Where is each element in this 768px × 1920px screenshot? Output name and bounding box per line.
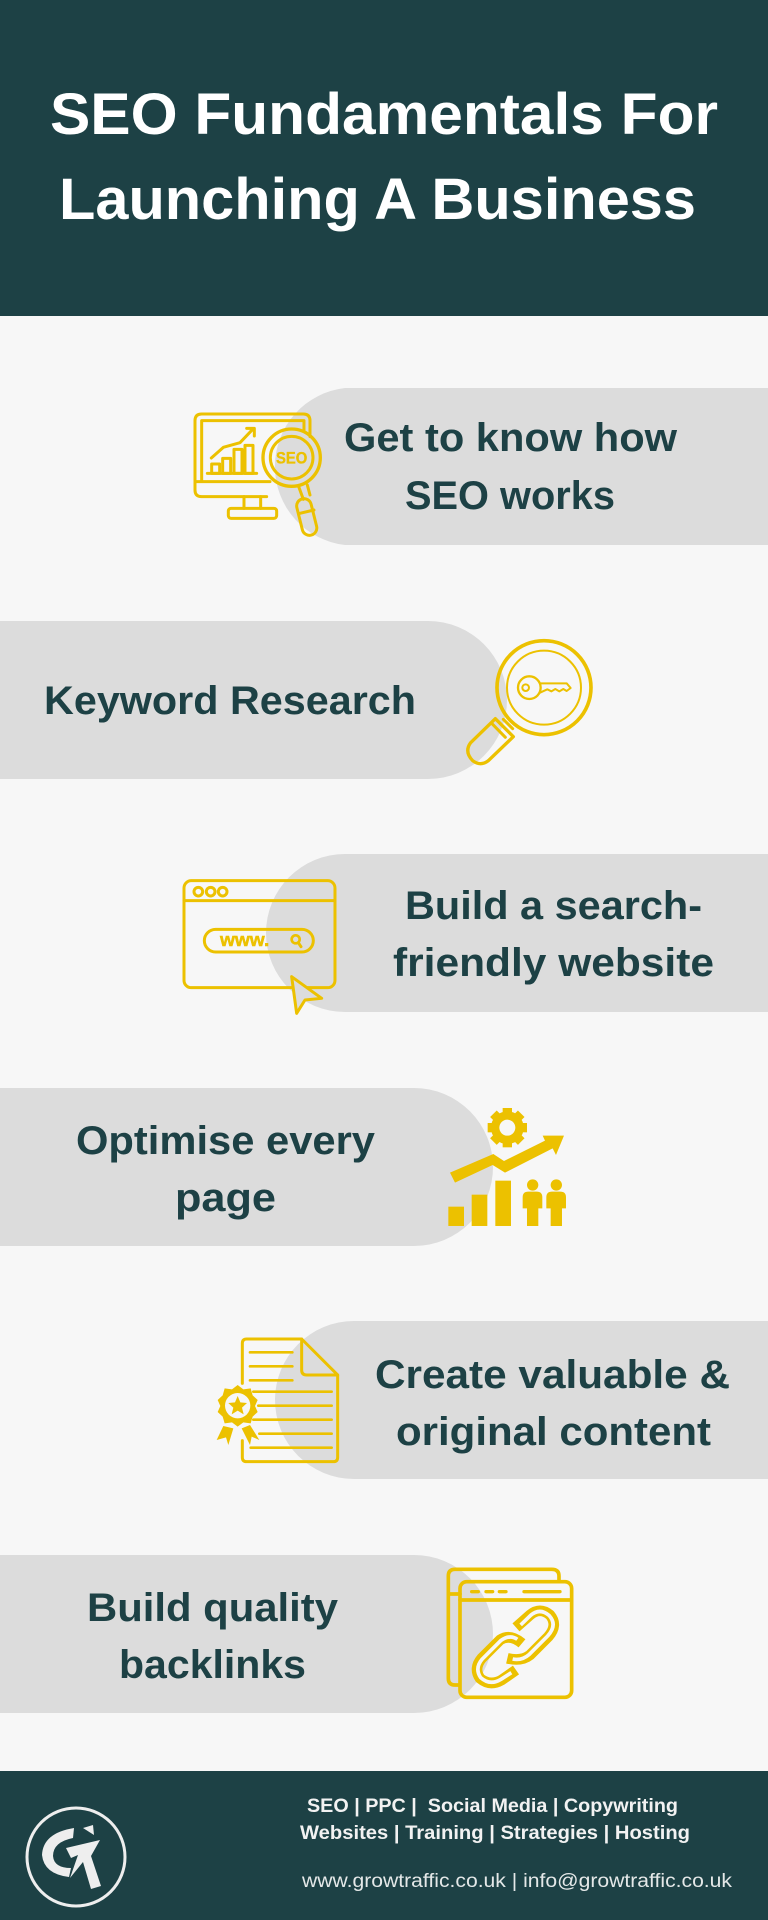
header banner xyxy=(0,0,768,316)
icon: growth chart with gear and people xyxy=(448,1108,566,1226)
heading: step 6: backlinks xyxy=(119,1643,306,1687)
heading: step 5 xyxy=(375,1353,730,1454)
heading: step 2: Keyword Research xyxy=(44,679,416,723)
icon: monitor with SEO magnifier: SEO xyxy=(276,449,307,468)
icon: browser with URL bar: www. xyxy=(219,929,269,950)
heading: step 3: friendly website xyxy=(393,941,714,985)
icon: magnifier with key xyxy=(468,641,591,764)
panel: build quality backlinks xyxy=(0,1555,572,1713)
title: SEO Fundamentals For xyxy=(50,82,718,147)
panel: optimise every page xyxy=(0,1088,566,1246)
heading: step 6 xyxy=(87,1586,339,1687)
icon: browser with URL bar xyxy=(184,881,335,1013)
footer banner xyxy=(0,1771,768,1920)
logo: GT roundel xyxy=(27,1808,125,1906)
heading: step 1: Get to know how xyxy=(344,416,678,460)
heading: step 5: original content xyxy=(396,1410,711,1454)
heading: step 3: Build a search- xyxy=(405,884,702,928)
icon: browser windows with chain link xyxy=(448,1569,572,1697)
panel: keyword research xyxy=(0,621,591,779)
icon: monitor with SEO magnifier xyxy=(195,414,320,537)
heading: step 4: page xyxy=(175,1176,276,1220)
panel: get to know how SEO works xyxy=(195,388,768,545)
heading: step 5: Create valuable & xyxy=(375,1353,730,1397)
title xyxy=(50,82,718,232)
contact details: www.growtraffic.co.uk | info@growtraffic.co.uk xyxy=(301,1871,733,1892)
heading: step 1 xyxy=(344,416,678,518)
panel: create valuable and original content xyxy=(217,1321,768,1479)
services list: SEO | PPC | Social Media | Copywriting xyxy=(307,1796,678,1817)
services list: Websites | Training | Strategies | Hosting xyxy=(300,1823,690,1844)
heading: step 3 xyxy=(393,884,714,985)
services list xyxy=(300,1796,690,1844)
heading: step 1: SEO works xyxy=(405,474,615,518)
icon: document with award badge xyxy=(217,1339,338,1462)
heading: step 6: Build quality xyxy=(87,1586,339,1630)
panel: build a search-friendly website xyxy=(184,854,768,1013)
heading: step 4 xyxy=(76,1119,376,1220)
title: Launching A Business xyxy=(59,167,696,232)
heading: step 4: Optimise every xyxy=(76,1119,376,1163)
